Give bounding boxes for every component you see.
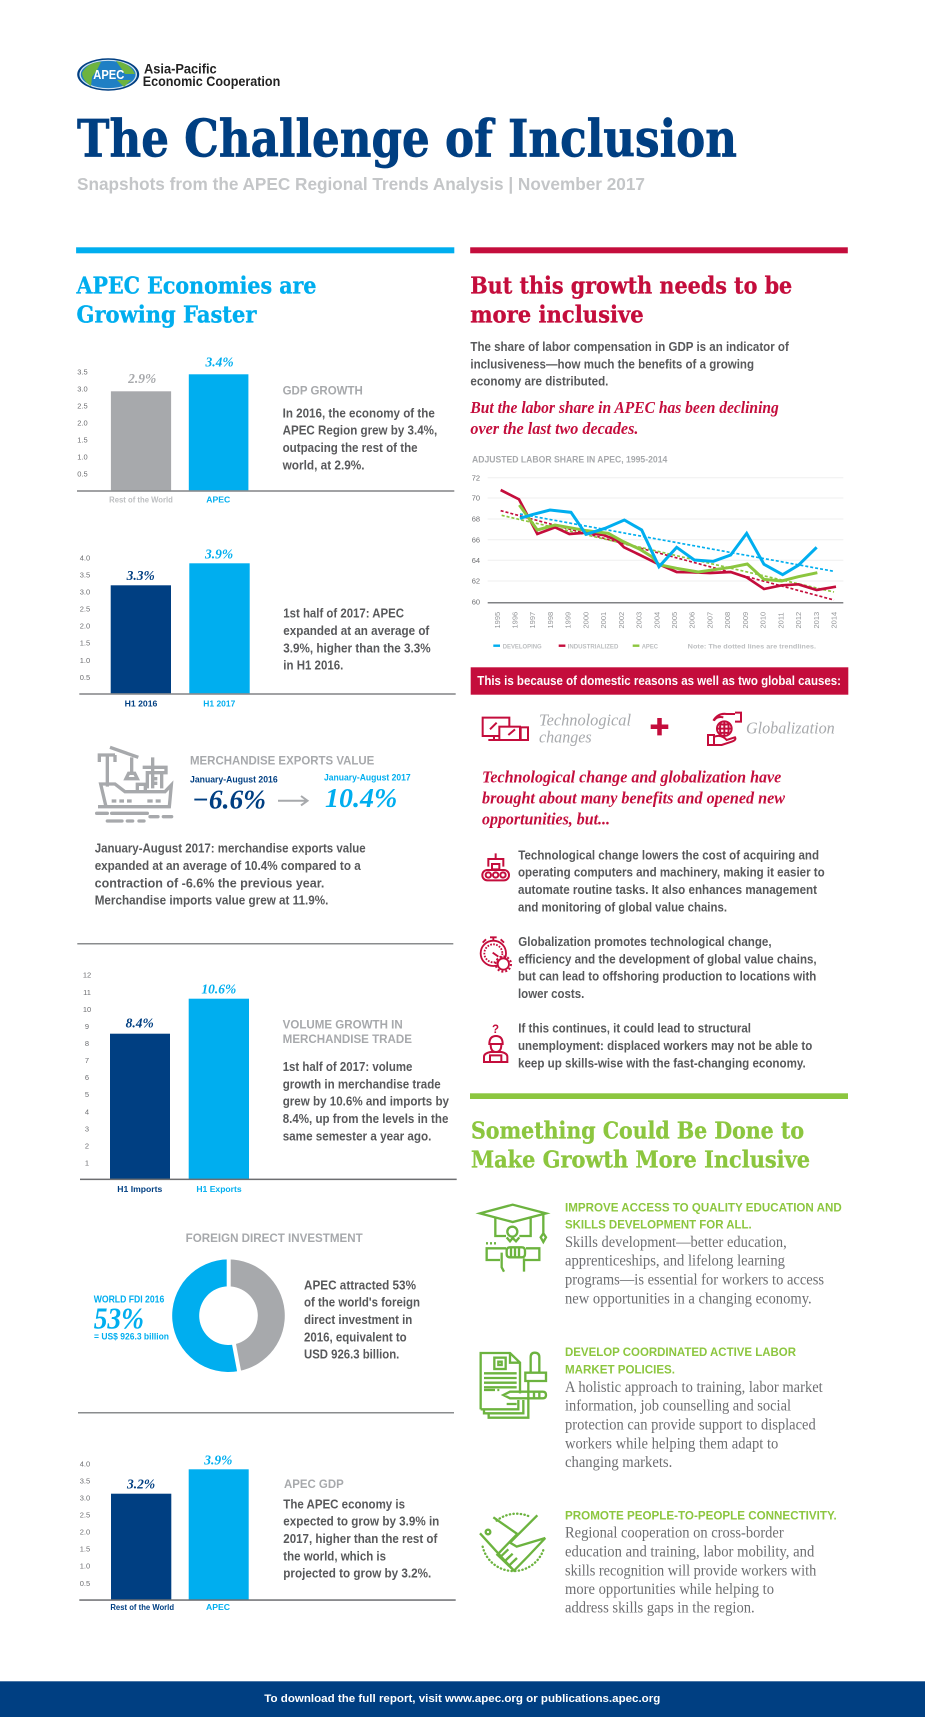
- text block: holistic approach: workers while helping them adapt to: [565, 1435, 779, 1452]
- x axis labels: 1995: [493, 612, 502, 628]
- bar chart: H1 2016 vs H1 2017: 3.5: [80, 571, 90, 580]
- item: globalization: [481, 935, 817, 1001]
- bar chart: GDP growth: 0.5: [77, 470, 88, 479]
- bar chart: H1 2016 vs H1 2017: 4.0: [80, 554, 90, 563]
- bar chart: APEC GDP forecast: 2.5: [80, 1511, 90, 1520]
- section heading: Make Growth More Inclusive: [471, 1147, 810, 1174]
- plotted lines: [501, 490, 836, 600]
- icon: globe: APEC: [93, 68, 124, 82]
- x axis labels: 1998: [546, 612, 555, 628]
- text block: merchandise exports: expanded at an average of 10.4% compared to a: [95, 859, 362, 873]
- stat: 2016 contraction: −6.6%: [192, 784, 266, 814]
- text block: FDI: [304, 1278, 420, 1362]
- x axis labels: 2010: [759, 612, 768, 628]
- section bar: green: [470, 1093, 848, 1099]
- arrow: [278, 796, 308, 805]
- text block: globalization: efficiency and the development of global value chains,: [518, 952, 817, 966]
- subtitle: Snapshots from the APEC Regional Trends Analysis | November 2017: [77, 174, 645, 194]
- label: volume growth: [283, 1020, 412, 1046]
- y axis labels: 62: [472, 577, 480, 586]
- text block: technological change: Technological change lowers the cost of acquiring and: [518, 848, 819, 862]
- bar: H1 imports: [110, 1034, 170, 1179]
- panel: first half 2017 growth: [79, 547, 456, 708]
- text block: structural unemployment: [518, 1022, 813, 1070]
- callout: world FDI: = US$ 926.3 billion: [94, 1331, 169, 1342]
- bar chart: H1 2016 vs H1 2017: H1 2017: [203, 699, 236, 708]
- text block: GDP growth: In 2016, the economy of the: [283, 406, 435, 420]
- bar chart: imports and exports: [80, 971, 457, 1194]
- bar chart: GDP growth: 3.0: [77, 384, 88, 393]
- text block: skills development: [565, 1234, 824, 1307]
- bar chart: H1 2016 vs H1 2017: 1.5: [80, 639, 90, 648]
- panel: foreign direct investment: [94, 1233, 420, 1376]
- section bar: blue: [76, 247, 454, 253]
- legend: DEVELOPING: [503, 644, 542, 650]
- stat: 2017 expansion: 10.4%: [325, 783, 397, 813]
- icon: devices: [483, 718, 528, 740]
- y axis labels: 68: [472, 515, 480, 524]
- callout: benefits and opportunities: Technological change and globalization have: [482, 768, 782, 787]
- x axis labels: 1997: [528, 612, 537, 628]
- panel: two causes: [483, 710, 835, 747]
- icon: globe in hands: [708, 713, 741, 745]
- text block: technological change: and monitoring of global value chains.: [518, 900, 727, 914]
- text block: first half 2017: in H1 2016.: [283, 659, 343, 673]
- bar chart: imports and exports: 8: [85, 1039, 89, 1048]
- bar chart: GDP growth: APEC: [206, 495, 231, 504]
- label: foreign direct investment: FOREIGN DIRECT INVESTMENT: [186, 1233, 363, 1245]
- text block: regional cooperation: Regional cooperation on cross-border: [565, 1525, 784, 1542]
- text block: APEC GDP: 2017, higher than the rest of: [283, 1532, 438, 1546]
- bar chart: imports and exports: 9: [85, 1022, 89, 1031]
- line: industrialized: [501, 490, 836, 590]
- footer: [0, 1681, 925, 1717]
- legend: [493, 644, 816, 650]
- icon: handshake: [480, 1514, 545, 1571]
- bar chart: H1 2016 vs H1 2017: H1 2016: [125, 699, 158, 708]
- bar chart: imports and exports: 1: [85, 1158, 89, 1167]
- line: APEC: [519, 505, 817, 581]
- trendline: developing: [520, 514, 834, 571]
- bar chart: APEC GDP forecast: Rest of the World: [110, 1603, 174, 1612]
- text block: skills development: apprenticeships, and lifelong learning: [565, 1253, 785, 1270]
- header: [77, 58, 737, 194]
- value: 8.4%: 8.4%: [126, 1016, 154, 1031]
- text block: volume growth: grew by 10.6% and imports by: [283, 1095, 449, 1109]
- bar: H1 2017: [189, 563, 250, 694]
- bar: H1 2016: [111, 585, 171, 694]
- bar chart: GDP growth: [77, 355, 454, 504]
- text block: merchandise exports: Merchandise imports value grew at 11.9%.: [95, 894, 328, 908]
- x axis labels: [493, 612, 838, 628]
- bar chart: GDP growth: 2.5: [77, 402, 88, 411]
- bar chart: imports and exports: H1 Exports: [196, 1185, 242, 1194]
- text block: globalization: [518, 935, 817, 1001]
- bar chart: APEC GDP forecast: 0.5: [80, 1579, 90, 1588]
- value: 3.9%: 3.9%: [203, 1453, 232, 1468]
- y axis labels: 72: [472, 473, 480, 482]
- text block: labor share intro: economy are distributed.: [470, 375, 608, 389]
- text block: labor share intro: [470, 340, 790, 389]
- heading: labor market policies: DEVELOP COORDINATED ACTIVE LABOR: [565, 1347, 797, 1359]
- section heading: [471, 1117, 810, 1174]
- text block: skills development: programs—is essential for workers to access: [565, 1272, 824, 1289]
- legend: INDUSTRIALIZED: [568, 644, 619, 650]
- text block: volume growth: growth in merchandise trade: [283, 1077, 441, 1091]
- text block: FDI: USD 926.3 billion.: [304, 1348, 399, 1362]
- bar chart: H1 2016 vs H1 2017: 2.0: [80, 622, 90, 631]
- value: 3.4%: 3.4%: [204, 355, 234, 370]
- text block: first half 2017: 1st half of 2017: APEC: [283, 607, 404, 621]
- text block: first half 2017: expanded at an average of: [283, 624, 430, 638]
- logo wordmark: Asia-Pacific: [144, 61, 217, 76]
- item: people-to-people connectivity: [480, 1510, 837, 1617]
- text block: regional cooperation: [565, 1525, 817, 1617]
- footer: To download the full report, visit www.apec.org or publications.apec.org: [264, 1693, 660, 1705]
- text block: structural unemployment: If this continues, it could lead to structural: [518, 1022, 751, 1036]
- bar chart: imports and exports: H1 Imports: [117, 1185, 163, 1194]
- text block: GDP growth: APEC Region grew by 3.4%,: [283, 424, 437, 438]
- x axis labels: 2013: [812, 612, 821, 628]
- stat: 2017 expansion: [324, 773, 411, 813]
- label: merchandise exports value: MERCHANDISE EXPORTS VALUE: [190, 755, 375, 767]
- text block: regional cooperation: address skills gaps in the region.: [565, 1600, 755, 1617]
- y axis labels: 64: [472, 556, 480, 565]
- text block: labor share intro: The share of labor compensation in GDP is an indicator of: [470, 340, 790, 354]
- text block: FDI: of the world's foreign: [304, 1296, 420, 1310]
- callout: benefits and opportunities: [482, 768, 786, 828]
- x axis labels: 2001: [599, 612, 608, 628]
- bar chart: APEC GDP forecast: 3.5: [80, 1476, 90, 1485]
- bar chart: imports and exports: 11: [83, 988, 91, 997]
- text block: labor share intro: inclusiveness—how much the benefits of a growing: [470, 357, 754, 371]
- value: 3.9%: 3.9%: [204, 547, 233, 562]
- bar chart: GDP growth: 2.0: [77, 419, 88, 428]
- heading: connectivity: PROMOTE PEOPLE-TO-PEOPLE CONNECTIVITY.: [565, 1510, 837, 1522]
- icon: documents and stamp: [481, 1353, 546, 1418]
- text block: regional cooperation: skills recognition will provide workers with: [565, 1562, 817, 1579]
- legend: APEC: [642, 644, 659, 650]
- callout: labor share declining: over the last two decades.: [470, 419, 638, 438]
- bar chart: H1 2016 vs H1 2017: 0.5: [80, 673, 90, 682]
- callout: world FDI: [94, 1294, 169, 1342]
- text block: GDP growth: [282, 406, 437, 472]
- bar chart: H1 2016 vs H1 2017: 3.0: [80, 588, 90, 597]
- label: volume growth: VOLUME GROWTH IN: [283, 1020, 403, 1032]
- y axis labels: [472, 473, 480, 606]
- value: 3.2%: 3.2%: [126, 1477, 155, 1492]
- callout: world FDI: 53%: [94, 1300, 144, 1335]
- legend: Note: The dotted lines are trendlines.: [688, 644, 816, 650]
- icon: globe: [77, 58, 139, 91]
- x axis labels: 2012: [794, 612, 803, 628]
- item: education: [480, 1202, 842, 1307]
- heading: labor market policies: [565, 1347, 797, 1376]
- text block: structural unemployment: unemployment: displaced workers may not be able to: [518, 1039, 813, 1053]
- bar chart: imports and exports: 5: [85, 1090, 89, 1099]
- x axis labels: 2009: [741, 612, 750, 628]
- text block: technological change: [518, 848, 825, 914]
- bar chart: imports and exports: 3: [85, 1124, 89, 1133]
- x axis labels: 2008: [723, 612, 732, 628]
- text block: holistic approach: changing markets.: [565, 1454, 672, 1471]
- text block: volume growth: 1st half of 2017: volume: [283, 1060, 412, 1074]
- trendline: APEC: [502, 515, 834, 592]
- bar chart: APEC GDP forecast: 1.0: [80, 1562, 90, 1571]
- text block: first half 2017: [283, 607, 431, 673]
- text block: holistic approach: information, job counselling and social: [565, 1398, 791, 1415]
- chart title: ADJUSTED LABOR SHARE IN APEC, 1995-2014: [472, 455, 667, 465]
- bar chart: H1 2016 vs H1 2017: 2.5: [80, 605, 90, 614]
- value: 3.3%: 3.3%: [126, 568, 155, 583]
- donut chart: [172, 1255, 285, 1376]
- item: labor market policies: [481, 1347, 823, 1471]
- heading: improve access: IMPROVE ACCESS TO QUALITY EDUCATION AND: [565, 1202, 842, 1214]
- value: 2.9%: 2.9%: [127, 371, 156, 386]
- text block: FDI: direct investment in: [304, 1313, 412, 1327]
- bar chart: GDP growth: 1.5: [77, 436, 88, 445]
- text block: merchandise exports: [95, 842, 366, 908]
- text block: FDI: APEC attracted 53%: [304, 1278, 416, 1292]
- text block: holistic approach: protection can provide support to displaced: [565, 1417, 816, 1434]
- section heading: more inclusive: [470, 301, 644, 328]
- text block: globalization: Globalization promotes technological change,: [518, 935, 772, 949]
- bar chart: GDP growth: Rest of the World: [109, 495, 173, 504]
- label: GDP growth: GDP GROWTH: [283, 386, 363, 398]
- text block: volume growth: [283, 1060, 449, 1143]
- text block: GDP growth: world, at 2.9%.: [282, 458, 365, 472]
- section heading: Something Could Be Done to: [471, 1117, 804, 1144]
- text block: technological change: automate routine tasks. It also enhances management: [518, 883, 818, 897]
- plus sign: [651, 718, 668, 735]
- text block: volume growth: 8.4%, up from the levels in the: [283, 1112, 448, 1126]
- logo wordmark: Economic Cooperation: [143, 74, 280, 89]
- label: technological changes: changes: [539, 728, 592, 747]
- stat: 2016 contraction: [190, 774, 278, 814]
- bar: rest of the world: [111, 1494, 171, 1600]
- bar chart: GDP growth: 1.0: [77, 453, 88, 462]
- text block: volume growth: same semester a year ago.: [283, 1129, 431, 1143]
- label: APEC GDP: APEC GDP: [284, 1479, 344, 1491]
- panel: merchandise exports value: [95, 747, 411, 908]
- icon: worker with question mark: ?: [492, 1024, 499, 1036]
- trendline: industrialized: [501, 511, 834, 600]
- bar chart: imports and exports: 4: [85, 1107, 89, 1116]
- x axis labels: 2003: [634, 612, 644, 628]
- x axis labels: 2007: [705, 612, 714, 628]
- item: technological change: [482, 848, 825, 914]
- section heading: [470, 272, 792, 328]
- bar chart: imports and exports: 10: [83, 1005, 91, 1014]
- text block: APEC GDP: projected to grow by 3.2%.: [283, 1567, 431, 1581]
- bar chart: imports and exports: 7: [85, 1056, 89, 1065]
- callout: labor share declining: [469, 398, 779, 438]
- APEC logo: [77, 58, 280, 91]
- value: 10.6%: 10.6%: [201, 981, 236, 996]
- title: The Challenge of Inclusion: [77, 110, 737, 170]
- text block: structural unemployment: keep up skills-wise with the fast-changing economy.: [518, 1056, 806, 1070]
- line chart: adjusted labor share: [472, 455, 843, 650]
- text block: GDP growth: outpacing the rest of the: [283, 441, 418, 455]
- icon: cargo ship: [97, 747, 172, 821]
- heading: improve access: [565, 1202, 842, 1232]
- bar chart: imports and exports: 6: [85, 1073, 89, 1082]
- text block: first half 2017: 3.9%, higher than the 3.3%: [283, 641, 431, 655]
- text block: technological change: operating computers and machinery, making it easier to: [518, 866, 825, 880]
- right column: growth needs to be more inclusive: [469, 247, 848, 1617]
- bar chart: imports and exports: 12: [83, 971, 91, 980]
- heading: improve access: SKILLS DEVELOPMENT FOR ALL.: [565, 1220, 752, 1232]
- y axis labels: 70: [472, 494, 480, 503]
- section heading: APEC Economies are: [76, 272, 316, 299]
- banner: two global causes: [471, 667, 848, 695]
- text block: holistic approach: [565, 1379, 823, 1471]
- text block: skills development: new opportunities in a changing economy.: [565, 1290, 812, 1307]
- text block: merchandise exports: contraction of -6.6% the previous year.: [95, 876, 324, 890]
- bar chart: APEC GDP forecast: 4.0: [80, 1459, 90, 1468]
- bar chart: APEC GDP forecast: 2.0: [80, 1528, 90, 1537]
- text block: skills development: Skills development—better education,: [565, 1234, 787, 1251]
- heading: labor market policies: MARKET POLICIES.: [565, 1364, 675, 1376]
- x axis labels: 1996: [510, 612, 520, 628]
- text block: APEC GDP: [283, 1497, 439, 1581]
- x axis labels: 2004: [652, 612, 661, 628]
- icon: robot conveyor: [482, 853, 509, 880]
- text block: merchandise exports: January-August 2017: merchandise exports value: [95, 842, 366, 856]
- callout: labor share declining: But the labor share in APEC has been declining: [469, 398, 779, 417]
- section heading: But this growth needs to be: [470, 272, 792, 299]
- line: developing: [520, 510, 817, 575]
- text block: regional cooperation: education and training, labor mobility, and: [565, 1544, 815, 1561]
- bar: APEC: [189, 1469, 249, 1600]
- callout: benefits and opportunities: opportunities, but...: [482, 809, 610, 828]
- bar: H1 exports: [189, 999, 249, 1179]
- panel: APEC GDP: [79, 1453, 456, 1612]
- text block: regional cooperation: more opportunities while helping to: [565, 1581, 774, 1598]
- banner: two global causes: This is because of domestic reasons as well as two global causes:: [477, 674, 841, 688]
- section: something could be done: [470, 1093, 848, 1617]
- label: technological changes: [539, 710, 631, 747]
- label: globalization: Globalization: [746, 718, 835, 737]
- x axis labels: 1999: [564, 612, 573, 628]
- section heading: Growing Faster: [76, 301, 257, 328]
- x axis labels: 2006: [688, 612, 697, 628]
- y axis labels: 66: [472, 535, 480, 544]
- logo wordmark: [143, 61, 280, 89]
- bar chart: H1 2016 vs H1 2017: 1.0: [80, 656, 90, 665]
- bar chart: APEC GDP forecast: APEC: [206, 1603, 230, 1612]
- bar: rest of the world: [111, 391, 171, 491]
- section bar: red: [470, 247, 848, 253]
- callout: benefits and opportunities: brought about many benefits and opened new: [482, 788, 786, 807]
- bar chart: APEC GDP forecast: [79, 1453, 456, 1612]
- bar chart: imports and exports: 2: [85, 1141, 89, 1150]
- label: volume growth: MERCHANDISE TRADE: [283, 1034, 412, 1046]
- icon: gauge and gear: [481, 937, 511, 972]
- text block: globalization: but can lead to offshoring production to locations with: [518, 970, 816, 984]
- icon: graduation cap: [480, 1205, 546, 1272]
- x axis labels: 2005: [670, 612, 679, 628]
- text block: APEC GDP: expected to grow by 3.9% in: [283, 1515, 439, 1529]
- panel: volume growth in merchandise trade: [80, 971, 457, 1194]
- x axis labels: 2011: [776, 612, 785, 628]
- bar chart: APEC GDP forecast: 3.0: [80, 1494, 90, 1503]
- panel: GDP growth: [77, 355, 454, 504]
- x axis labels: 2002: [617, 612, 626, 628]
- item: structural unemployment: [484, 1022, 813, 1070]
- text block: holistic approach: A holistic approach to training, labor market: [565, 1379, 823, 1396]
- label: technological changes: Technological: [539, 710, 631, 729]
- x axis labels: 2000: [581, 612, 590, 628]
- bar chart: GDP growth: 3.5: [77, 367, 88, 376]
- left column: APEC economies growing faster: [76, 247, 457, 1612]
- callout: world FDI: WORLD FDI 2016: [94, 1294, 165, 1305]
- bar chart: APEC GDP forecast: 1.5: [80, 1545, 90, 1554]
- icon: worker with question mark: [484, 1024, 507, 1062]
- bar chart: H1 2016 vs H1 2017: [79, 547, 456, 708]
- bar: APEC: [189, 374, 248, 491]
- stat: 2016 contraction: January-August 2016: [190, 774, 278, 785]
- x axis labels: 2014: [830, 612, 838, 628]
- text block: FDI: 2016, equivalent to: [304, 1330, 407, 1344]
- stat: 2017 expansion: January-August 2017: [324, 773, 411, 784]
- text block: APEC GDP: the world, which is: [283, 1549, 386, 1563]
- y axis labels: 60: [472, 597, 480, 606]
- text block: APEC GDP: The APEC economy is: [283, 1497, 405, 1511]
- text block: globalization: lower costs.: [518, 987, 584, 1001]
- section heading: [76, 272, 316, 328]
